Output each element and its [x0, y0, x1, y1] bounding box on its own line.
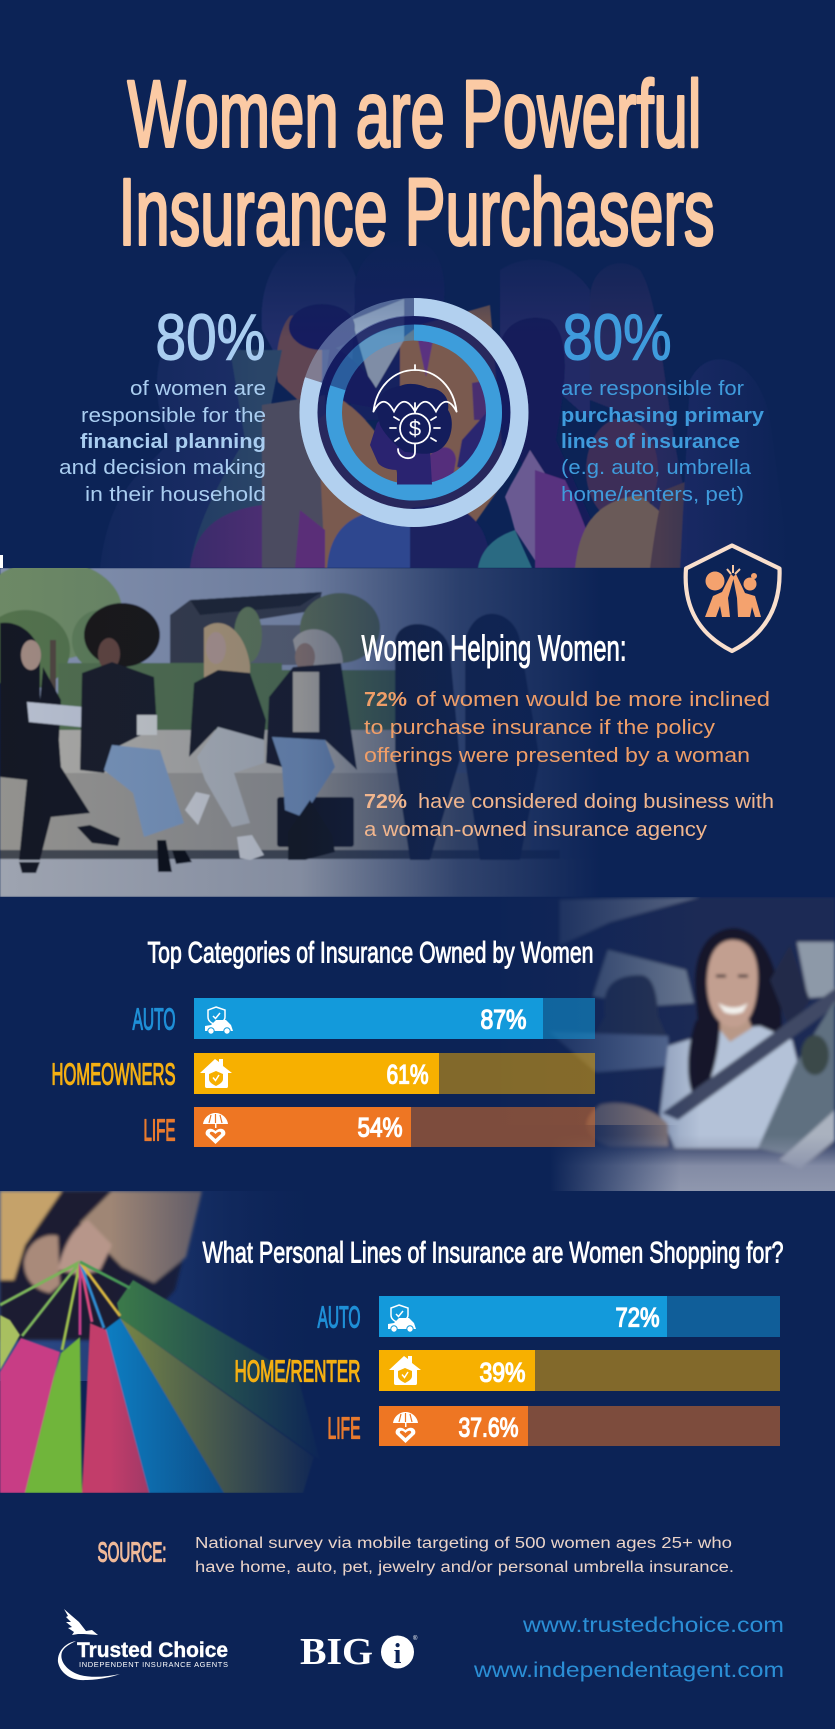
icon: shield with women high-five [686, 546, 780, 651]
text block: 72 percent woman-owned agency: 72% [364, 791, 407, 813]
bar: homeowners 61 percent: 61% [386, 1060, 428, 1090]
woman 1 [0, 623, 90, 860]
bar: auto 72 percent: 72% [616, 1302, 660, 1332]
text block: 72 percent woman-owned agency [364, 791, 774, 841]
hedge [58, 663, 282, 731]
icon: umbrella over dollar coin [374, 365, 456, 458]
logo: Trusted Choice: INDEPENDENT INSURANCE AGENTS [79, 1660, 228, 1669]
donut chart: 80 percent with umbrella icon [308, 307, 520, 518]
text block: 72 percent inclined: to purchase insurance if the policy [364, 717, 715, 739]
bar: life 37.6 percent: 37.6% [458, 1412, 518, 1442]
white corner mark [0, 555, 3, 568]
stat: left 80 percent financial planning: of women are [130, 378, 266, 400]
panel: photo of four women sitting [0, 568, 570, 897]
text block: 72 percent woman-owned agency: have considered doing business with [418, 791, 774, 813]
stat: left 80 percent financial planning: 80% [156, 300, 266, 374]
website links: www.independentagent.com [473, 1659, 784, 1682]
logo: Trusted Choice: Trusted Choice [77, 1639, 228, 1662]
bar: auto 72 percent [318, 1296, 780, 1337]
website links [473, 1614, 784, 1682]
logo: Trusted Choice [58, 1609, 228, 1680]
heading: women helping women: Women Helping Women: [362, 628, 626, 668]
source label: SOURCE: [98, 1536, 166, 1568]
trees [0, 560, 122, 660]
bar: auto 87 percent [132, 998, 595, 1039]
bar: life 37.6 percent: LIFE [328, 1410, 360, 1446]
icon: eagle [64, 1609, 98, 1635]
stat: right 80 percent primary lines: (e.g. auto, umbrella [561, 457, 752, 479]
website links: www.trustedchoice.com [522, 1614, 784, 1637]
woman 2 [84, 603, 160, 667]
bar: home/renter 39 percent [234, 1350, 780, 1391]
bar: auto 87 percent: 87% [480, 1004, 526, 1034]
stat: right 80 percent primary lines: 80% [562, 300, 672, 374]
text block: 72 percent inclined [364, 689, 770, 767]
bar chart: personal lines shopping [234, 1296, 780, 1446]
text block: 72 percent inclined: of women would be more inclined [416, 689, 770, 711]
heading: top categories: Top Categories of Insurance Owned by Women [148, 936, 594, 970]
bench [58, 729, 397, 774]
stat: left 80 percent financial planning: in their household [85, 484, 266, 506]
stat: right 80 percent primary lines [561, 300, 765, 506]
faded reflected women [395, 624, 460, 860]
stat: right 80 percent primary lines: lines of insurance [561, 431, 740, 453]
bar: life 54 percent: 54% [358, 1112, 402, 1142]
bar: life 37.6 percent [328, 1406, 780, 1446]
stat: left 80 percent financial planning: responsible for the [81, 405, 266, 427]
bar: home/renter 39 percent: HOME/RENTER [234, 1354, 360, 1388]
bar chart: top categories owned [52, 998, 595, 1148]
stat: right 80 percent primary lines: are responsible for [561, 378, 744, 400]
logo: BIG i: ® [413, 1635, 418, 1642]
stat: left 80 percent financial planning: and decision making [59, 457, 266, 479]
head silhouette [370, 400, 432, 484]
bar: homeowners 61 percent [52, 1053, 595, 1094]
panel: photo of shopping bags [0, 1191, 335, 1493]
stat: left 80 percent financial planning: financial planning [80, 431, 266, 453]
bar: auto 87 percent: AUTO [132, 1002, 176, 1036]
donut chart: 80 percent with umbrella icon: $ [409, 416, 421, 441]
bar: life 54 percent [144, 1107, 595, 1148]
woman 3 [202, 622, 251, 678]
panel: photo of woman driving [556, 897, 835, 1191]
bar: home/renter 39 percent: 39% [480, 1358, 526, 1388]
bar: auto 72 percent: AUTO [318, 1300, 360, 1334]
stat: right 80 percent primary lines: home/renters, pet) [561, 484, 744, 506]
title [118, 62, 714, 266]
logo: BIG i: i [394, 1639, 402, 1670]
text block: 72 percent woman-owned agency: a woman-owned insurance agency [364, 819, 707, 841]
woman 4 [292, 628, 344, 666]
source text: National survey via mobile targeting of 500 women ages 25+ who [195, 1535, 732, 1552]
source text [195, 1535, 734, 1576]
text block: 72 percent inclined: offerings were presented by a woman [364, 745, 750, 767]
bar: life 54 percent: LIFE [144, 1112, 176, 1148]
bar: homeowners 61 percent: HOMEOWNERS [52, 1056, 176, 1092]
logo: BIG i: BIG [300, 1631, 373, 1673]
stat: right 80 percent primary lines: purchasing primary [561, 405, 765, 427]
source text: have home, auto, pet, jewelry and/or personal umbrella insurance. [195, 1559, 734, 1576]
logo: BIG i [300, 1631, 418, 1673]
stat: left 80 percent financial planning [59, 300, 266, 506]
text block: 72 percent inclined: 72% [364, 689, 407, 711]
panel: silhouettes of women [130, 265, 725, 568]
